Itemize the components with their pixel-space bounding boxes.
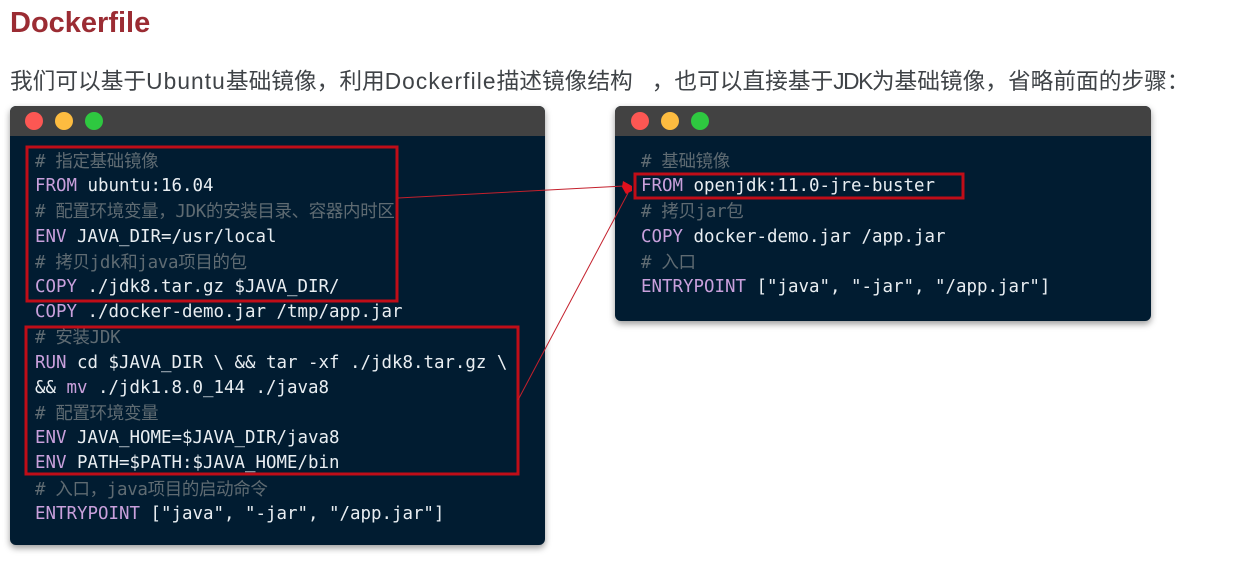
highlight: base image and env steps xyxy=(27,147,397,301)
intro text: 我们可以基于Ubuntu基础镜像，利用Dockerfile描述镜像结构 ，也可以直接基于JDK为基础镜像，省略前面的步骤： xyxy=(10,68,1190,94)
code block: Ubuntu-based Dockerfile: # 指定基础镜像 FROM ubuntu:16.04 # 配置环境变量，JDK的安装目录、容器内时区 ENV JAVA_DIR=/usr/local # 拷贝jdk和java项目的包 COPY ./jdk8.tar.gz $JAVA_DIR/ COPY ./docker-demo.jar /tmp/app.jar # 安装JDK RUN cd $JAVA_DIR \ && tar -xf ./jdk8.tar.gz \ && mv ./jdk1.8.0_144 ./java8 # 配置环境变量 ENV JAVA_HOME=$JAVA_DIR/java8 ENV PATH=$PATH:$JAVA_HOME/bin # 入口，java项目的启动命令 ENTRYPOINT ["java", "-jar", "/app.jar"] xyxy=(35,152,507,524)
panel: Ubuntu-based Dockerfile window xyxy=(10,106,545,545)
arrowhead xyxy=(622,181,632,194)
highlight: openjdk base image xyxy=(635,174,963,198)
window title bar xyxy=(615,106,1151,136)
window title bar xyxy=(10,106,545,136)
panel: JDK-based Dockerfile window xyxy=(615,106,1151,321)
arrow: first box to openjdk xyxy=(398,186,624,198)
arrow: second box to openjdk xyxy=(518,193,628,400)
code block: JDK-based Dockerfile: # 基础镜像 FROM openjdk:11.0-jre-buster # 拷贝jar包 COPY docker-demo.jar /app.jar # 入口 ENTRYPOINT ["java", "-jar", "/app.jar"] xyxy=(641,152,1050,297)
title: Dockerfile xyxy=(10,7,150,39)
highlight: JDK install steps xyxy=(26,327,518,474)
